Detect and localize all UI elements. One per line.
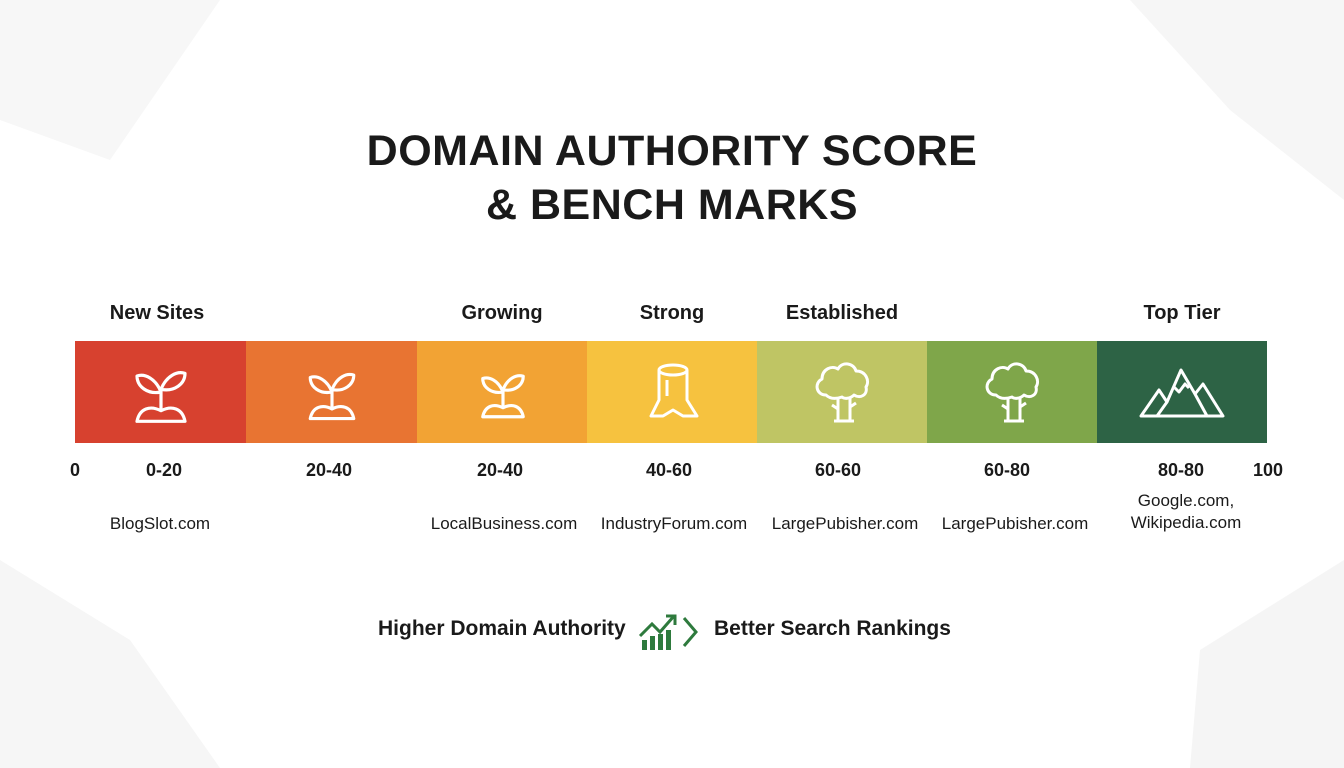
tier label: Top Tier: Top Tier xyxy=(1143,302,1221,324)
segment 3 sprout xyxy=(417,341,588,443)
segment 5 tree xyxy=(757,341,928,443)
example sites: BlogSlot.com xyxy=(110,514,210,533)
tier label: Growing: Growing xyxy=(461,302,543,324)
title xyxy=(367,127,977,229)
range labels: 0-20 xyxy=(146,460,182,480)
example sites: Google.com, xyxy=(1138,491,1234,510)
example sites: LargePubisher.com xyxy=(772,514,918,533)
footer message: Higher Domain Authority xyxy=(378,617,626,640)
segment 1 sprout xyxy=(75,341,246,443)
segment 2 sprout xyxy=(246,341,417,443)
segment 4 stump xyxy=(587,341,758,443)
range labels xyxy=(70,460,1283,480)
range labels: 60-60 xyxy=(815,460,861,480)
segment 6 tree xyxy=(927,341,1098,443)
range labels: 0 xyxy=(70,460,80,480)
example sites: Wikipedia.com xyxy=(1131,513,1241,532)
range labels: 20-40 xyxy=(306,460,352,480)
range labels: 60-80 xyxy=(984,460,1030,480)
tier label: Strong: Strong xyxy=(640,302,704,324)
range labels: 40-60 xyxy=(646,460,692,480)
example sites: LocalBusiness.com xyxy=(431,514,577,533)
tier label: New Sites: New Sites xyxy=(110,302,204,324)
range labels: 20-40 xyxy=(477,460,523,480)
range labels: 100 xyxy=(1253,460,1283,480)
footer message xyxy=(378,614,951,650)
range labels: 80-80 xyxy=(1158,460,1204,480)
segment 7 mountain xyxy=(1097,341,1267,443)
example sites: IndustryForum.com xyxy=(601,514,747,533)
title: & BENCH MARKS xyxy=(486,181,858,229)
example sites xyxy=(110,491,1241,533)
title: DOMAIN AUTHORITY SCORE xyxy=(367,127,977,175)
icon: growth chart arrow xyxy=(639,614,698,650)
example sites: LargePubisher.com xyxy=(942,514,1088,533)
score bar xyxy=(75,341,1267,443)
tier label: Established: Established xyxy=(786,302,898,324)
footer message: Better Search Rankings xyxy=(714,617,951,640)
